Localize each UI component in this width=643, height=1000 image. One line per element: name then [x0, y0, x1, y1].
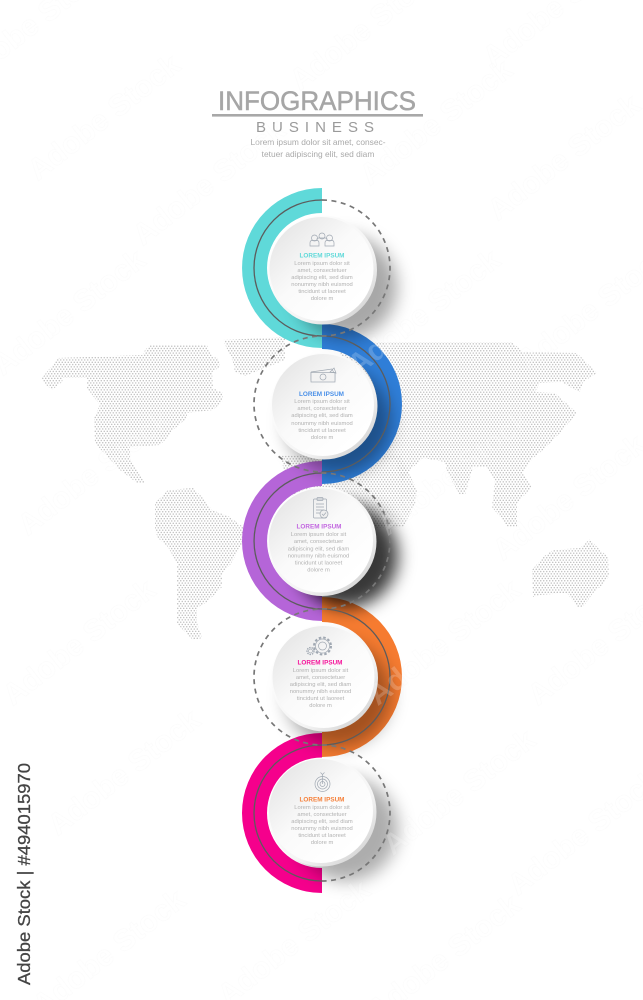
watermark: Adobe Stock — [22, 48, 187, 187]
body 5: dolore m — [311, 840, 333, 846]
body 2: Lorem ipsum dolor sit — [294, 399, 350, 405]
watermark: Adobe Stock — [342, 243, 507, 382]
disc 5 — [268, 758, 376, 866]
shadow 2 — [285, 368, 391, 474]
body 2: dolore m — [311, 435, 333, 441]
body 1: dolore m — [311, 296, 333, 302]
stock id vertical text: Adobe Stock | #494015970 — [14, 763, 34, 985]
body 4: Lorem ipsum dolor sit — [293, 668, 349, 674]
step 3 — [268, 487, 376, 596]
body 4: nonummy nibh euismod — [290, 689, 351, 695]
body 5: nonummy nibh euismod — [291, 826, 353, 832]
world map dotted background — [42, 337, 609, 640]
step 2 — [270, 352, 378, 460]
heading 2: LOREM IPSUM — [299, 391, 344, 398]
heading 5: LOREM IPSUM — [300, 796, 345, 804]
watermark: Adobe Stock — [42, 703, 207, 842]
map: south america — [155, 488, 243, 640]
watermark: Adobe Stock — [127, 113, 292, 252]
title — [212, 86, 423, 159]
watermark: Adobe Stock — [354, 53, 519, 192]
body 3: amet, consectetuer — [294, 539, 343, 545]
shadow 1 — [293, 235, 397, 339]
watermark: Adobe Stock — [0, 573, 162, 712]
map: greenland — [223, 337, 285, 376]
solid line segments — [254, 200, 390, 881]
map: north america — [42, 345, 223, 483]
long shadows under discs — [285, 235, 398, 881]
shadow 3 — [294, 504, 398, 608]
ring 4 orange — [322, 597, 402, 757]
icon: gears — [307, 638, 331, 654]
map: eurasia — [340, 342, 597, 527]
disc 1 — [268, 216, 377, 324]
map: africa — [280, 455, 417, 530]
body 4: tincidunt ut laoreet — [297, 696, 345, 702]
body 3: dolore m — [307, 568, 330, 574]
icon: people — [310, 233, 334, 246]
watermark: Adobe Stock — [482, 88, 643, 227]
body 1: tincidunt ut laoreet — [298, 289, 346, 295]
watermark: Adobe Stock — [362, 573, 527, 712]
body 3: Lorem ipsum dolor sit — [291, 532, 347, 538]
body 5: adipiscing elit, sed diam — [291, 819, 353, 825]
dashed line segments — [254, 200, 390, 881]
shadow 4 — [285, 641, 391, 747]
subtitle: BUSINESS: BUSINESS — [256, 119, 374, 136]
icon: target — [315, 772, 330, 792]
body 3: adipiscing elit, sed diam — [288, 546, 349, 552]
intro text: Lorem ipsum dolor sit amet, consec- — [251, 137, 386, 147]
body 3: nonummy nibh euismod — [288, 554, 349, 560]
watermark: Adobe Stock — [372, 403, 537, 542]
body 2: nonummy nibh euismod — [291, 421, 353, 427]
watermark: Adobe Stock — [12, 403, 177, 542]
disc 2 — [270, 352, 378, 460]
body 1: Lorem ipsum dolor sit — [294, 261, 350, 267]
body 5: tincidunt ut laoreet — [298, 833, 346, 839]
body 1: adipiscing elit, sed diam — [291, 275, 353, 281]
step 5 — [268, 758, 376, 866]
title: INFOGRAPHICS: INFOGRAPHICS — [218, 86, 416, 116]
body 5: amet, consectetuer — [297, 812, 347, 818]
body 5: Lorem ipsum dolor sit — [294, 805, 350, 811]
body 4: amet, consectetuer — [296, 675, 345, 681]
disc 3 — [268, 487, 376, 596]
body 4: dolore m — [309, 703, 332, 709]
title underline — [212, 114, 423, 117]
heading 4: LOREM IPSUM — [298, 660, 343, 666]
body 2: adipiscing elit, sed diam — [291, 413, 353, 419]
body 1: amet, consectetuer — [297, 268, 347, 274]
map: australia — [532, 539, 609, 607]
heading 3: LOREM IPSUM — [296, 524, 342, 530]
heading 1: LOREM IPSUM — [300, 252, 345, 260]
step 4 — [271, 624, 378, 732]
body 4: adipiscing elit, sed diam — [290, 682, 351, 688]
connecting line — [254, 200, 390, 881]
step 1 — [268, 216, 377, 324]
body 3: tincidunt ut laoreet — [295, 560, 343, 566]
body 2: tincidunt ut laoreet — [298, 428, 346, 434]
ring 5 pink — [242, 733, 322, 893]
shadow 5 — [294, 777, 398, 881]
icon: banknote — [311, 368, 336, 382]
watermark: Adobe Stock — [377, 723, 542, 862]
coloured half rings — [242, 188, 402, 893]
ring 2 blue — [322, 324, 402, 484]
icon: clipboard — [314, 498, 328, 518]
body 2: amet, consectetuer — [297, 406, 347, 412]
intro text: tetuer adipiscing elit, sed diam — [262, 149, 374, 159]
ring 3 purple — [242, 461, 322, 621]
disc 4 — [271, 624, 378, 732]
ring 1 teal — [242, 188, 322, 348]
body 1: nonummy nibh euismod — [291, 282, 353, 288]
